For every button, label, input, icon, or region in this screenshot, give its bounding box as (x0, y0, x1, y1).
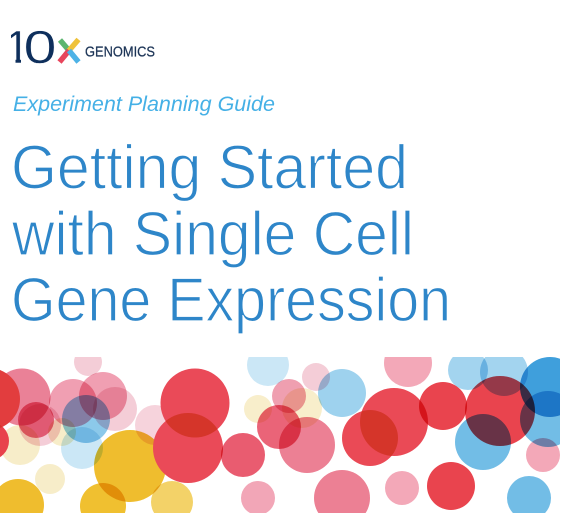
logo: 10x Genomics (11, 30, 154, 64)
title (11, 134, 451, 335)
icon: coloured X (60, 40, 78, 62)
yellow circles (0, 430, 193, 513)
logo: 10x Genomics: 1 (4, 21, 30, 73)
logo: 10x Genomics: GENOMICS (85, 44, 155, 60)
title: Gene Expression (11, 266, 451, 335)
decorative bubble banner (0, 357, 560, 513)
title: with Single Cell (11, 200, 414, 269)
title: Getting Started (11, 134, 408, 202)
logo: 10x Genomics: 0 (24, 21, 56, 73)
pale circles (0, 344, 330, 494)
subtitle: Experiment Planning Guide (13, 93, 275, 116)
red circles (0, 368, 535, 510)
pink circles (6, 357, 560, 513)
blue circles (62, 348, 561, 513)
red overlaps (0, 410, 398, 456)
